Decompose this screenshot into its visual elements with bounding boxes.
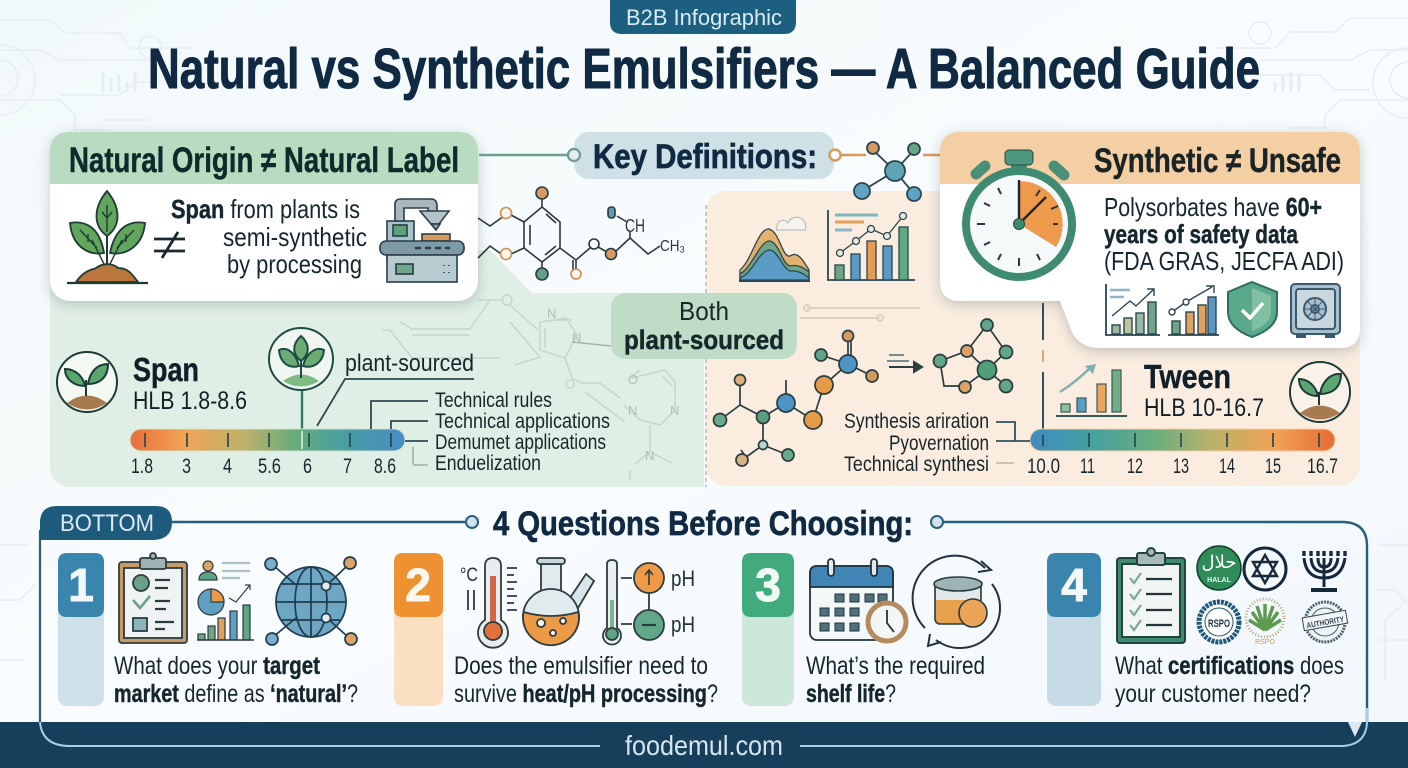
text: question 3: What’s the required [806, 652, 985, 680]
text: question 2: Does the emulsifier need to [454, 652, 708, 680]
molecule: tween left [714, 330, 878, 466]
arrow: synthesis [887, 355, 922, 372]
badge: halal: حلال [1202, 552, 1236, 573]
icon: clipboard [119, 553, 187, 643]
icon: jar shelf life [913, 556, 1000, 648]
number tab 4 [1047, 553, 1101, 706]
scale: tween HLB: 11 [1080, 455, 1095, 478]
icon: market data [197, 561, 254, 640]
question 3 [742, 553, 1000, 708]
number tab 3 [742, 553, 794, 706]
label: tween [1144, 358, 1264, 422]
number tab 4: 4 [1061, 559, 1087, 611]
label: span: HLB 1.8-8.6 [133, 387, 247, 415]
panel: tween background [706, 191, 1360, 487]
background molecule [382, 295, 675, 480]
divider: tween vertical [1042, 303, 1044, 429]
text: question 4: your customer need? [1115, 680, 1311, 708]
labels: span applications: Technical applications [435, 410, 610, 433]
scale: tween HLB: 10.0 [1027, 455, 1060, 478]
text: question 3: shelf life? [806, 680, 896, 708]
card: synthetic not unsafe [940, 132, 1360, 348]
scale: span HLB: 4 [223, 455, 232, 478]
connector and molecule: top right [830, 142, 940, 201]
labels: pH [671, 566, 695, 637]
labels: tween applications: Pyovernation [889, 432, 989, 455]
icon: pH gauge [603, 560, 664, 644]
badge: RSPO palm [1246, 599, 1284, 646]
icon: calendar [810, 559, 906, 641]
labels: tween applications: Technical synthesi [844, 453, 989, 476]
number tab 2: 2 [405, 559, 431, 611]
icon: flask [523, 558, 594, 645]
text: question 3 [806, 652, 985, 708]
panel: span background [50, 250, 704, 487]
text: N [547, 306, 556, 321]
scale: span HLB: 6 [303, 455, 312, 478]
labels: span applications: Technical rules [435, 389, 552, 412]
text: span from plants: semi-synthetic [223, 222, 367, 252]
question 2 [394, 553, 718, 708]
card: natural origin [50, 132, 478, 301]
scale: tween HLB: 14 [1219, 455, 1235, 478]
icon: thermometer [460, 558, 517, 648]
decorative connectors: tween panel [800, 305, 920, 321]
scale: tween HLB: 16.7 [1307, 455, 1338, 478]
text: N [645, 448, 654, 463]
pill: key definitions [568, 132, 834, 179]
label: tween: Tween [1144, 358, 1231, 395]
text: question 2 [454, 652, 718, 708]
icon: thermometer: °C [460, 565, 478, 586]
text: span from plants: Span from plants is [171, 194, 360, 224]
tab: BOTTOM: BOTTOM [60, 510, 154, 537]
scale: tween HLB: 13 [1173, 455, 1189, 478]
label: tween: HLB 10-16.7 [1144, 394, 1264, 422]
molecule: tween right [934, 319, 1012, 393]
labels: pH: pH [671, 566, 695, 591]
callout: both plant-sourced [611, 293, 797, 359]
text: question 2: survive heat/pH processing? [454, 680, 718, 708]
icon: mountain chart [739, 217, 810, 281]
scale: span HLB [130, 429, 405, 478]
icon: span plant [57, 352, 117, 412]
icon: bars and line chart [828, 210, 915, 280]
icon: factory [380, 199, 464, 282]
text: question 1: What does your target [114, 652, 321, 680]
badge: authority: AUTHORITY [1306, 615, 1345, 630]
molecule: center top: CH [625, 216, 645, 236]
callout: both plant-sourced: Both [679, 296, 729, 326]
connector: left to key definitions [479, 149, 580, 161]
label: plant-sourced [317, 350, 474, 426]
icon: stopwatch [966, 150, 1072, 277]
pill: key definitions: Key Definitions: [593, 138, 817, 176]
badge: authority [1302, 602, 1348, 642]
badge: halal [1197, 546, 1241, 590]
footer bar: foodemul.com [625, 730, 783, 761]
number tab 2 [394, 553, 443, 706]
molecule: center top [478, 187, 685, 280]
labels: pH: pH [671, 612, 695, 637]
question 1 [58, 553, 358, 708]
text: question 1 [114, 652, 358, 708]
badge: RSPO seal: RSPO [1208, 618, 1230, 630]
badge: B2B Infographic [610, 0, 796, 34]
text: span from plants [171, 194, 367, 279]
molecule: center top: CH₃ [660, 238, 685, 255]
scale: tween HLB: 12 [1127, 455, 1143, 478]
text: polysorbates: years of safety data [1104, 219, 1298, 249]
text: polysorbates: Polysorbates have 60+ [1104, 192, 1322, 222]
text: polysorbates: (FDA GRAS, JECFA ADI) [1104, 246, 1344, 276]
labels: tween applications: Synthesis ariration [844, 410, 989, 433]
scale: span HLB: 8.6 [374, 455, 396, 478]
icon: tween bar chart [1056, 364, 1127, 416]
number tab 1 [58, 553, 104, 706]
scale: span HLB: 1.8 [131, 455, 153, 478]
icon: line and bars chart [1168, 286, 1219, 335]
tab: BOTTOM [40, 506, 172, 540]
question 4 [1047, 546, 1348, 708]
labels: span applications: Demumet applications [435, 431, 606, 454]
icon: plant [67, 191, 148, 283]
number tab 1: 1 [68, 559, 94, 611]
text: N [572, 330, 581, 345]
badge: kosher star [1244, 548, 1286, 590]
icon: safe [1291, 284, 1340, 337]
text: polysorbates [1104, 192, 1344, 276]
badge: B2B Infographic: B2B Infographic [626, 5, 782, 30]
icon: rising bar chart [1106, 284, 1160, 335]
icon: not equal [154, 232, 185, 258]
label: plant-sourced: plant-sourced [345, 350, 474, 377]
number tab 3: 3 [755, 559, 781, 611]
heading: natural origin: Natural Origin ≠ Natural Label [69, 141, 459, 180]
icon: checklist [1117, 548, 1185, 643]
text: span from plants: by processing [227, 249, 362, 279]
text: question 4: What certifications does [1115, 652, 1344, 680]
scale: span HLB: 5.6 [258, 455, 281, 478]
text: N [628, 403, 637, 418]
scale: span HLB: 3 [182, 455, 191, 478]
icon: shield [1228, 282, 1277, 337]
labels: span applications [371, 389, 610, 475]
text: N [670, 403, 679, 418]
panel outline: bottom section [40, 516, 1367, 746]
icon: tween plant [1290, 362, 1350, 422]
icon: globe network [265, 557, 357, 645]
scale: span HLB: 7 [343, 455, 352, 478]
badge: menorah [1304, 551, 1345, 590]
footer bar [0, 722, 1408, 768]
label: span [133, 351, 247, 415]
heading: 4 questions: 4 Questions Before Choosing: [493, 505, 913, 543]
label: span: Span [133, 351, 199, 388]
scale: tween HLB: 15 [1265, 455, 1281, 478]
badge: RSPO palm: RSPO [1255, 639, 1275, 646]
labels: span applications: Enduelization [435, 452, 541, 475]
heading: synthetic not unsafe: Synthetic ≠ Unsafe [1094, 142, 1341, 180]
badge: halal: HALAL [1207, 577, 1232, 584]
text: question 1: market define as ‘natural’? [114, 680, 358, 708]
icon: plant-sourced marker [269, 328, 333, 430]
text: question 4 [1115, 652, 1344, 708]
scale: tween HLB [1027, 429, 1338, 478]
text: O [628, 372, 638, 387]
callout: both plant-sourced: plant-sourced [624, 325, 784, 355]
badge: RSPO seal [1199, 602, 1239, 642]
labels: tween applications [844, 410, 1030, 476]
